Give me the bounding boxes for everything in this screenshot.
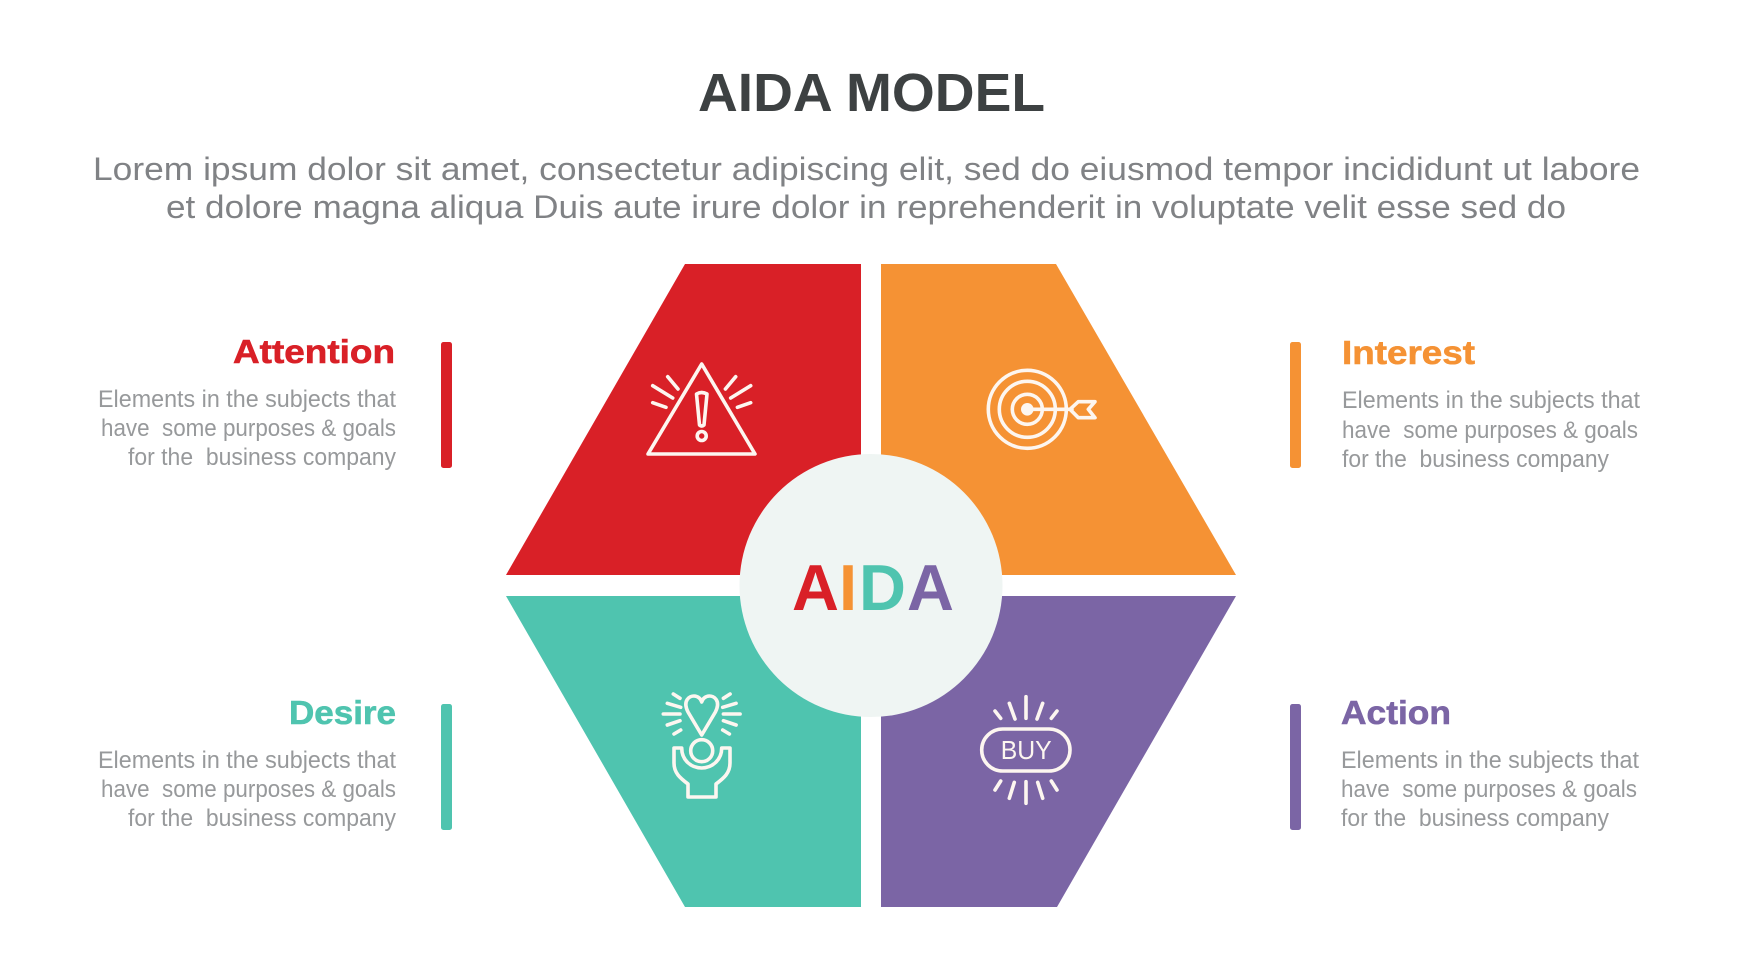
panel: desire segment: [506, 596, 861, 907]
description: desire: for the business company: [128, 805, 396, 832]
heading: desire: Desire: [289, 694, 396, 731]
icon: target with arrow: [988, 370, 1095, 448]
accent bar: attention: [441, 342, 452, 468]
description: attention: for the business company: [128, 444, 396, 471]
heading: attention: Attention: [233, 333, 395, 370]
block: interest: [1342, 334, 1640, 473]
icon: buy button: [982, 697, 1070, 803]
center label AIDA: D: [859, 551, 906, 624]
description: action: for the business company: [1341, 805, 1609, 832]
description: action: [1341, 747, 1639, 832]
subtitle text: [93, 151, 1640, 225]
accent bar: interest: [1290, 342, 1301, 468]
description: interest: for the business company: [1342, 446, 1609, 473]
center label AIDA: A: [792, 551, 839, 624]
block: action: [1341, 694, 1639, 832]
description: action: Elements in the subjects that: [1341, 747, 1639, 774]
center circle: [740, 454, 1002, 717]
icon: warning triangle: [648, 364, 755, 454]
icon: heart above hands: [663, 694, 740, 797]
description: interest: Elements in the subjects that: [1342, 387, 1640, 414]
block: desire: [98, 694, 396, 832]
panel: action segment: [881, 596, 1236, 907]
description: interest: [1342, 387, 1640, 473]
panel: attention segment: [506, 264, 861, 575]
description: desire: have some purposes & goals: [101, 776, 396, 803]
title: AIDA MODEL: [698, 63, 1045, 123]
heading: interest: Interest: [1342, 334, 1475, 371]
center label AIDA: I: [839, 551, 857, 624]
panel: interest segment: [881, 264, 1236, 575]
center label AIDA: A: [907, 551, 954, 624]
icon: buy button: BUY: [1001, 735, 1052, 765]
block: attention: [98, 333, 396, 471]
description: interest: have some purposes & goals: [1342, 417, 1638, 444]
description: action: have some purposes & goals: [1341, 776, 1637, 803]
description: attention: Elements in the subjects that: [98, 386, 396, 413]
description: attention: have some purposes & goals: [101, 415, 396, 442]
description: desire: Elements in the subjects that: [98, 747, 396, 774]
accent bar: desire: [441, 704, 452, 830]
accent bar: action: [1290, 704, 1301, 830]
heading: action: Action: [1341, 694, 1451, 731]
description: desire: [98, 747, 396, 832]
subtitle text: Lorem ipsum dolor sit amet, consectetur adipiscing elit, sed do eiusmod tempor incididunt ut labore: [93, 151, 1640, 187]
description: attention: [98, 386, 396, 471]
subtitle text: et dolore magna aliqua Duis aute irure dolor in reprehenderit in voluptate velit esse sed do: [166, 189, 1566, 225]
